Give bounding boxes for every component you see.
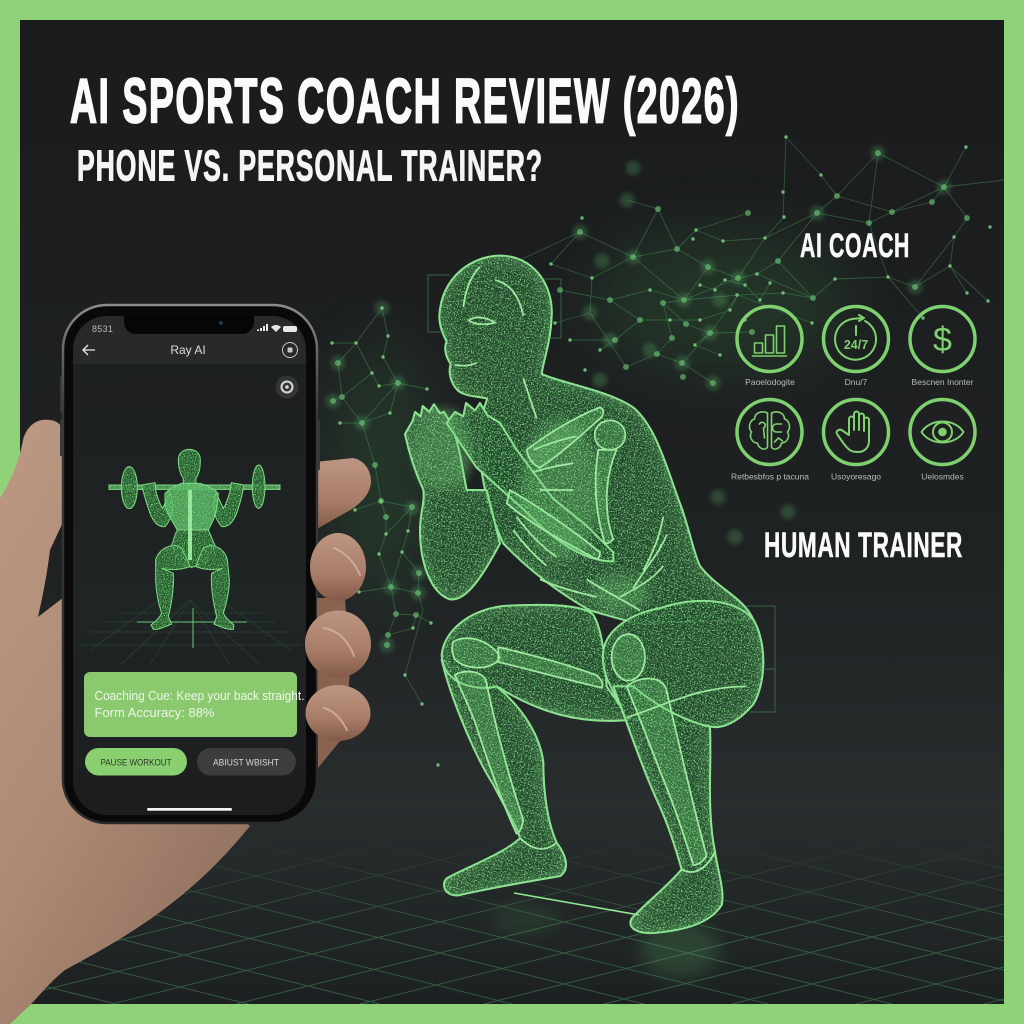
menu icon	[282, 342, 298, 358]
icon: raised hand	[824, 400, 888, 464]
figure legs	[151, 546, 190, 629]
icon: 24/7 clock: 24/7	[844, 338, 868, 352]
side buttons	[60, 376, 320, 470]
app title: Ray AI	[170, 343, 206, 357]
icon labels: Paoelodogite	[745, 377, 795, 387]
rib and contour lines	[513, 436, 747, 872]
chest and hand glow	[413, 410, 650, 611]
figure head	[178, 449, 200, 483]
fingers in front of phone	[305, 533, 371, 768]
icon: brain	[737, 400, 802, 464]
near leg and foot	[613, 686, 723, 933]
smartphone	[60, 305, 320, 823]
icon labels	[731, 377, 974, 482]
finger three	[305, 610, 371, 678]
far leg and foot	[442, 660, 566, 895]
figure spine	[188, 490, 192, 560]
figure ribcage	[165, 483, 218, 530]
weight plates	[121, 467, 137, 509]
icon labels: Uelosmdes	[921, 472, 964, 482]
adjust weight button	[197, 748, 296, 776]
figure lower torso	[172, 530, 215, 567]
near arm and hand	[447, 403, 613, 561]
AI coach heading: AI COACH	[800, 227, 910, 265]
phone figure with barbell	[109, 449, 280, 629]
near thigh and hip	[603, 601, 763, 727]
finger two	[310, 533, 366, 601]
network nodes	[333, 153, 967, 645]
subtitle: PHONE VS. PERSONAL TRAINER?	[77, 142, 543, 190]
finger webbing	[317, 598, 350, 768]
face detail	[455, 267, 537, 419]
icon grid	[731, 306, 975, 482]
home indicator	[147, 808, 232, 811]
scan brackets around body	[428, 275, 775, 712]
finger one behind phone	[315, 458, 371, 530]
pause workout button	[85, 748, 187, 776]
network glow	[330, 230, 850, 600]
network edges	[332, 137, 1004, 704]
far thigh	[442, 605, 630, 721]
icon: bar chart	[737, 306, 802, 372]
finger four	[306, 685, 370, 741]
inner bones and muscle lines	[452, 407, 707, 865]
icon labels: Dnu/7	[845, 377, 868, 387]
floor alignment line	[514, 893, 639, 915]
phone crosshair	[137, 608, 247, 648]
torso and head	[439, 256, 753, 624]
status icons	[257, 324, 297, 332]
holographic squatting body figure	[405, 256, 763, 933]
camera	[219, 321, 223, 325]
icon: 24/7 clock	[824, 306, 888, 372]
network halos	[333, 153, 944, 645]
figure arms	[142, 483, 173, 527]
floor grid	[43, 851, 1004, 1004]
fingernail highlights	[324, 548, 360, 730]
status time: 8531	[92, 324, 113, 334]
icon: dollar sign	[910, 306, 975, 372]
phone floor grid	[80, 600, 300, 665]
hand palm and thumb	[0, 420, 371, 1024]
coaching cue text: Coaching Cue: Keep your back straight.	[94, 689, 304, 703]
icon: eye	[910, 400, 975, 464]
pause workout button: PAUSE WORKOUT	[100, 758, 172, 768]
icon labels: Usoyoresago	[831, 472, 881, 482]
notch	[124, 316, 254, 334]
icon labels: Retbesbfos p tacuna	[731, 472, 809, 482]
adjust weight button: ABIUST WBISHT	[213, 758, 279, 768]
phone body	[63, 305, 317, 823]
icon labels: Bescnen Inonter	[912, 377, 974, 387]
form accuracy text: Form Accuracy: 88%	[94, 706, 214, 720]
app header bar	[73, 316, 306, 364]
coaching cue card	[84, 672, 304, 737]
far arm and hand	[405, 404, 500, 599]
icon: dollar sign: $	[933, 321, 952, 359]
foot reflections on floor	[489, 906, 720, 978]
camera switch button	[276, 376, 298, 398]
back arrow	[83, 345, 95, 355]
neural network background	[330, 137, 1004, 765]
phone screen	[73, 316, 306, 815]
barbell	[109, 485, 280, 489]
